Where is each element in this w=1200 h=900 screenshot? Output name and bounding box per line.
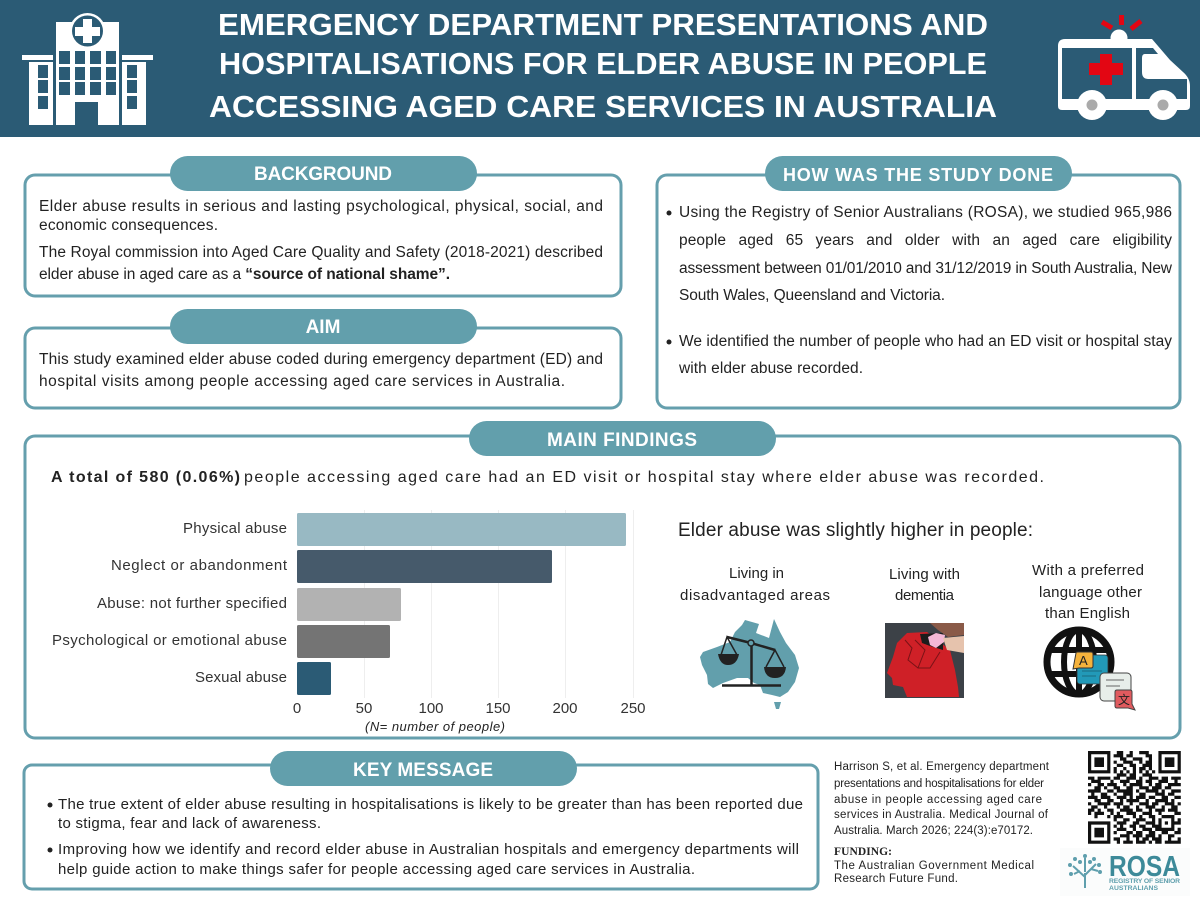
ROSA logo: ROSA (1109, 851, 1180, 883)
heading: how was the study done: HOW WAS THE STUDY DONE (783, 165, 1053, 185)
text: background: elder abuse in aged care as a “source of national shame”. (39, 266, 450, 283)
group: dementia (885, 566, 964, 698)
group: disadvantaged areas (680, 565, 830, 709)
bar: neglect or abandonment: Neglect or abandonment (111, 557, 288, 574)
text: background: The Royal commission into Aged Care Quality and Safety (2018-2021) described (39, 244, 603, 261)
bar: neglect or abandonment (111, 550, 552, 583)
bar: physical abuse (183, 513, 626, 546)
panel: how was the study done (657, 156, 1180, 408)
heading: aim: AIM (306, 317, 340, 338)
group: dementia: dementia (895, 587, 955, 604)
icon: Australia map with scales (700, 619, 799, 709)
group: language other than English: language other (1039, 584, 1142, 601)
heading: key message (270, 751, 577, 786)
panel: main findings (25, 421, 1180, 738)
citation (834, 761, 1050, 837)
heading: how was the study done (765, 156, 1072, 191)
x axis labels (293, 700, 646, 717)
text: background: economic consequences. (39, 217, 218, 234)
text: key message: help guide action to make things safer for people accessing aged care services in Australia. (58, 861, 695, 878)
title (209, 7, 997, 124)
icon: hospital (22, 13, 153, 125)
bar: psychological or emotional abuse (52, 625, 390, 658)
text: headline finding: people accessing aged care had an ED visit or hospital stay where elder abuse was recorded. (244, 469, 1044, 486)
text: aim: hospital visits among people accessing aged care services in Australia. (39, 373, 565, 390)
panel: key message (24, 751, 818, 889)
icon: globe with speech bubbles (1047, 630, 1135, 710)
text: key message: to stigma, fear and lack of awareness. (58, 815, 321, 832)
text: aim (39, 351, 603, 390)
icon: globe with speech bubbles: 文 (1118, 692, 1130, 707)
heading: key message: KEY MESSAGE (353, 760, 493, 781)
heading: background (170, 156, 477, 191)
bar: abuse not further specified: Abuse: not further specified (97, 595, 287, 612)
funding: Research Future Fund. (834, 873, 958, 885)
group: dementia: Living with (889, 566, 960, 583)
title: EMERGENCY DEPARTMENT PRESENTATIONS AND (218, 7, 988, 42)
citation: Harrison S, et al. Emergency department (834, 761, 1050, 773)
funding (834, 846, 1034, 885)
group: disadvantaged areas: Living in (729, 565, 784, 582)
icon: ambulance (1058, 15, 1190, 120)
text: methods: We identified the number of people who had an ED visit or hospital stay (679, 333, 1172, 350)
text: key message (48, 796, 803, 878)
group: language other than English: than English (1045, 605, 1130, 622)
x axis labels: 0 (293, 700, 301, 717)
bar: abuse not further specified (97, 588, 401, 621)
panel: aim (25, 309, 621, 408)
x axis labels: 100 (418, 700, 444, 717)
title: ACCESSING AGED CARE SERVICES IN AUSTRALIA (209, 89, 997, 124)
funding: The Australian Government Medical (834, 860, 1034, 872)
text: methods: assessment between 01/01/2010 and 31/12/2019 in South Australia, New (679, 260, 1173, 277)
ROSA logo: AUSTRALIANS (1109, 885, 1158, 892)
text: aim: This study examined elder abuse coded during emergency department (ED) and (39, 351, 603, 368)
panel: background (25, 156, 621, 296)
x axis labels: 150 (485, 700, 511, 717)
icon: globe with speech bubbles: A (1079, 653, 1088, 668)
ROSA logo (1060, 848, 1190, 896)
citation: services in Australia. Medical Journal of (834, 809, 1049, 821)
text: headline finding: A total of 580 (0.06%) (51, 469, 240, 486)
text: methods: with elder abuse recorded. (678, 360, 863, 377)
text: methods: people aged 65 years and older with an aged care eligibility (679, 232, 1172, 249)
text: methods (666, 204, 1173, 377)
x axis labels: 250 (620, 700, 646, 717)
heading: main findings (469, 421, 776, 456)
text: background (39, 198, 603, 283)
text: methods: South Wales, Queensland and Victoria. (679, 287, 945, 304)
bar: sexual abuse (195, 662, 331, 695)
icon: tree (1068, 854, 1102, 888)
bar chart: types of elder abuse (52, 510, 646, 734)
subheading: higher in people: Elder abuse was slightly higher in people: (678, 520, 1033, 541)
axis note: (N= number of people) (365, 719, 505, 734)
citation: presentations and hospitalisations for elder (834, 778, 1044, 790)
bar: psychological or emotional abuse: Psychological or emotional abuse (52, 632, 287, 649)
heading: background: BACKGROUND (254, 164, 392, 185)
icon: head puzzle (885, 623, 964, 698)
group: language other than English: With a preferred (1032, 562, 1144, 579)
QR code (1088, 753, 1181, 842)
x axis labels: 50 (356, 700, 372, 717)
text: key message: Improving how we identify and record elder abuse in Australian hospitals and emergency departments will (58, 841, 799, 858)
text: methods: Using the Registry of Senior Australians (ROSA), we studied 965,986 (679, 204, 1172, 221)
text: key message: The true extent of elder abuse resulting in hospitalisations is likely to be greater than has been reported due (58, 796, 803, 813)
heading: aim (170, 309, 477, 344)
title: HOSPITALISATIONS FOR ELDER ABUSE IN PEOPLE (219, 46, 987, 81)
funding: FUNDING: (834, 846, 892, 858)
heading: main findings: MAIN FINDINGS (547, 430, 697, 451)
bar: physical abuse: Physical abuse (183, 520, 287, 537)
text: background: Elder abuse results in serious and lasting psychological, physical, social, and (39, 198, 603, 215)
citation: Australia. March 2026; 224(3):e70172. (834, 825, 1033, 837)
x axis labels: 200 (552, 700, 578, 717)
group: language other than English (1032, 562, 1144, 710)
bar: sexual abuse: Sexual abuse (195, 669, 287, 686)
group: disadvantaged areas: disadvantaged areas (680, 587, 830, 604)
ROSA logo: REGISTRY OF SENIOR (1109, 878, 1180, 885)
header banner (0, 0, 1200, 137)
citation: abuse in people accessing aged care (834, 794, 1042, 806)
